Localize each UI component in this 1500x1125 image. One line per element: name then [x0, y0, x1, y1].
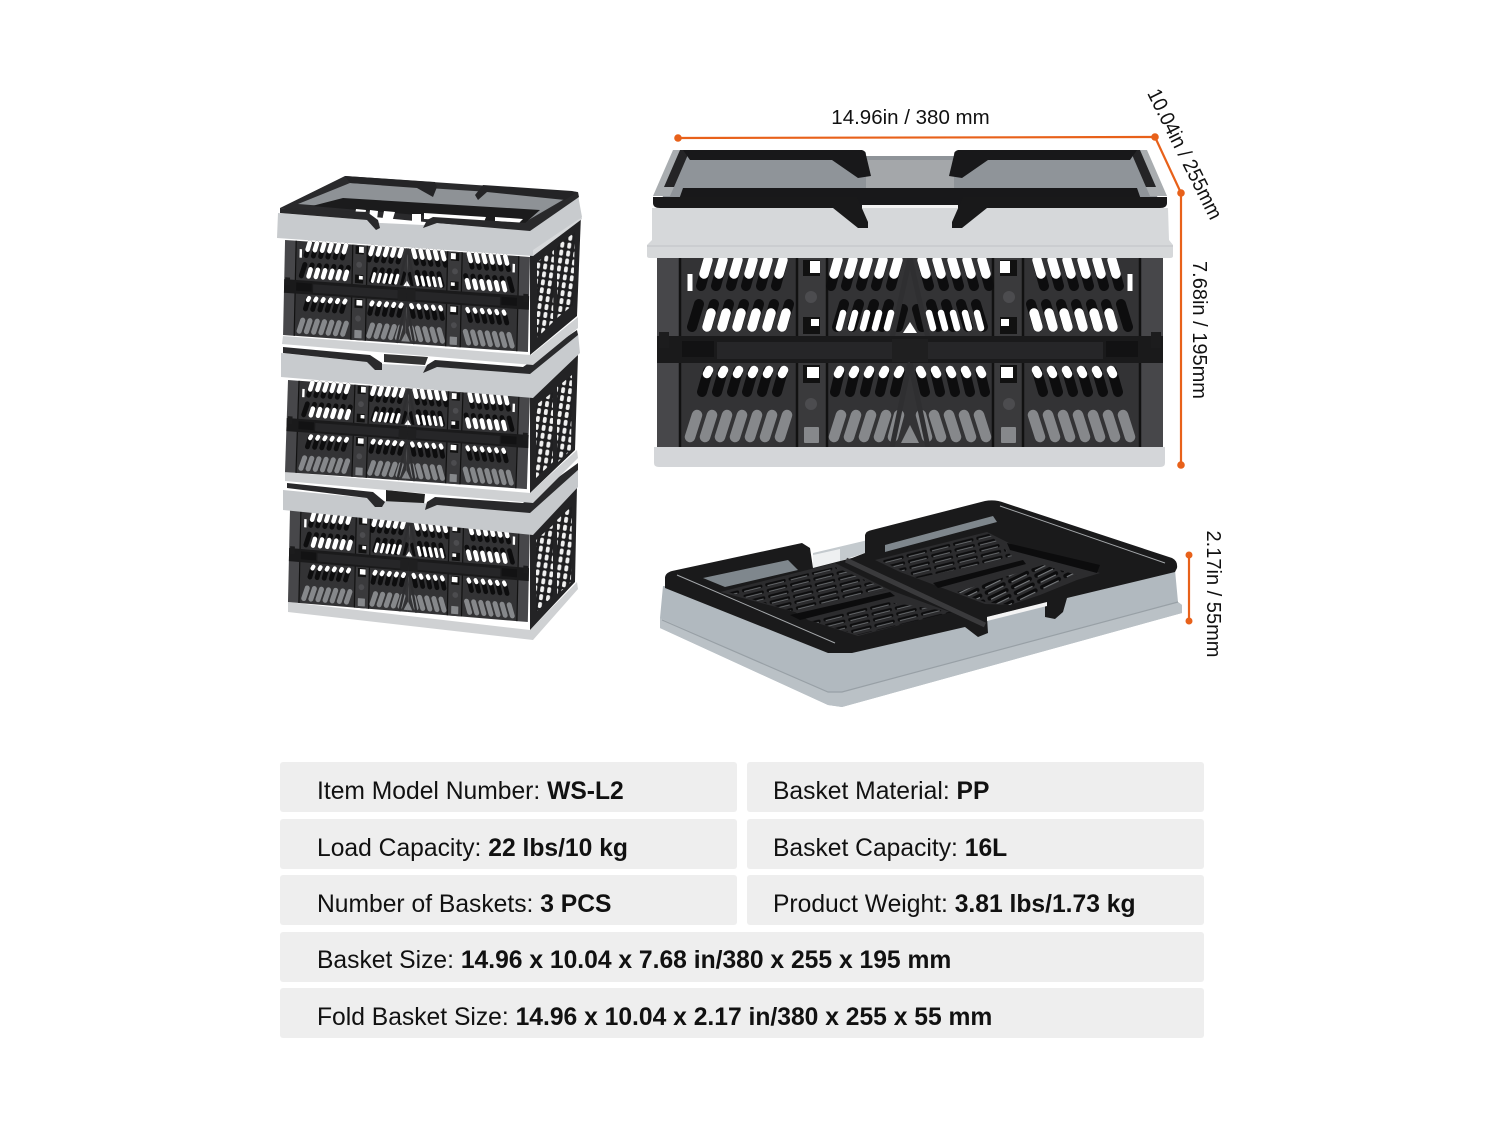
front handle right	[952, 197, 1167, 228]
width dimension line	[674, 133, 1159, 142]
height dimension line	[1177, 193, 1185, 469]
specification table	[280, 762, 1204, 1038]
depth dimension line	[1155, 137, 1185, 197]
folded back notch	[813, 540, 868, 570]
basket interior	[660, 156, 1160, 205]
folded basket with dimension	[660, 500, 1225, 707]
basket 1 top	[277, 176, 582, 365]
row: basket size	[280, 932, 1204, 982]
basket 2 middle	[281, 330, 580, 503]
folded slots	[728, 567, 888, 612]
height label: 7.68in / 195mm	[1188, 261, 1211, 399]
folded panels	[720, 563, 950, 636]
row: load capacity: Load Capacity: 22 lbs/10 kg	[317, 835, 628, 862]
row: load capacity	[280, 819, 737, 869]
large open basket with dimensions	[647, 85, 1227, 469]
basket body front	[657, 258, 1163, 447]
folded gray recesses	[703, 516, 997, 587]
stack of three baskets	[277, 176, 582, 640]
row: fold basket size	[280, 988, 1204, 1038]
row: basket capacity	[747, 819, 1204, 869]
basket base	[654, 447, 1165, 467]
folded notch	[987, 602, 1047, 621]
back handle left	[683, 150, 871, 178]
folded basket black top	[665, 500, 1177, 653]
folded height label: 2.17in / 55mm	[1202, 530, 1225, 658]
back handle right	[949, 150, 1137, 178]
basket 1 band	[277, 195, 582, 256]
row: basket capacity: Basket Capacity: 16L	[773, 835, 1007, 862]
row: product weight	[747, 875, 1204, 925]
width label: 14.96in / 380 mm	[831, 106, 990, 129]
folded basket gray body	[660, 570, 1182, 707]
row: basket material: Basket Material: PP	[773, 778, 989, 805]
row: item model number	[280, 762, 737, 812]
row: number of baskets: Number of Baskets: 3 PCS	[317, 891, 611, 918]
row: basket material	[747, 762, 1204, 812]
basket 1 rim and interior	[280, 176, 578, 232]
basket 3 bottom	[283, 463, 578, 640]
folded height line	[1186, 552, 1192, 624]
row: basket size: Basket Size: 14.96 x 10.04 x 7.68 in/380 x 255 x 195 mm	[317, 947, 951, 974]
basket band	[647, 208, 1173, 258]
folded dark bars	[790, 543, 1100, 620]
row: item model number: Item Model Number: WS-L2	[317, 778, 624, 805]
row: number of baskets	[280, 875, 737, 925]
basket rim sides	[653, 150, 1167, 196]
row: product weight: Product Weight: 3.81 lbs/1.73 kg	[773, 891, 1136, 918]
folded rim highlights	[677, 506, 1165, 643]
folded panel seam	[846, 560, 985, 625]
depth label: 10.04in / 255mm	[1142, 85, 1227, 223]
front handle left	[653, 197, 868, 228]
row: fold basket size: Fold Basket Size: 14.96 x 10.04 x 2.17 in/380 x 255 x 55 mm	[317, 1004, 992, 1031]
